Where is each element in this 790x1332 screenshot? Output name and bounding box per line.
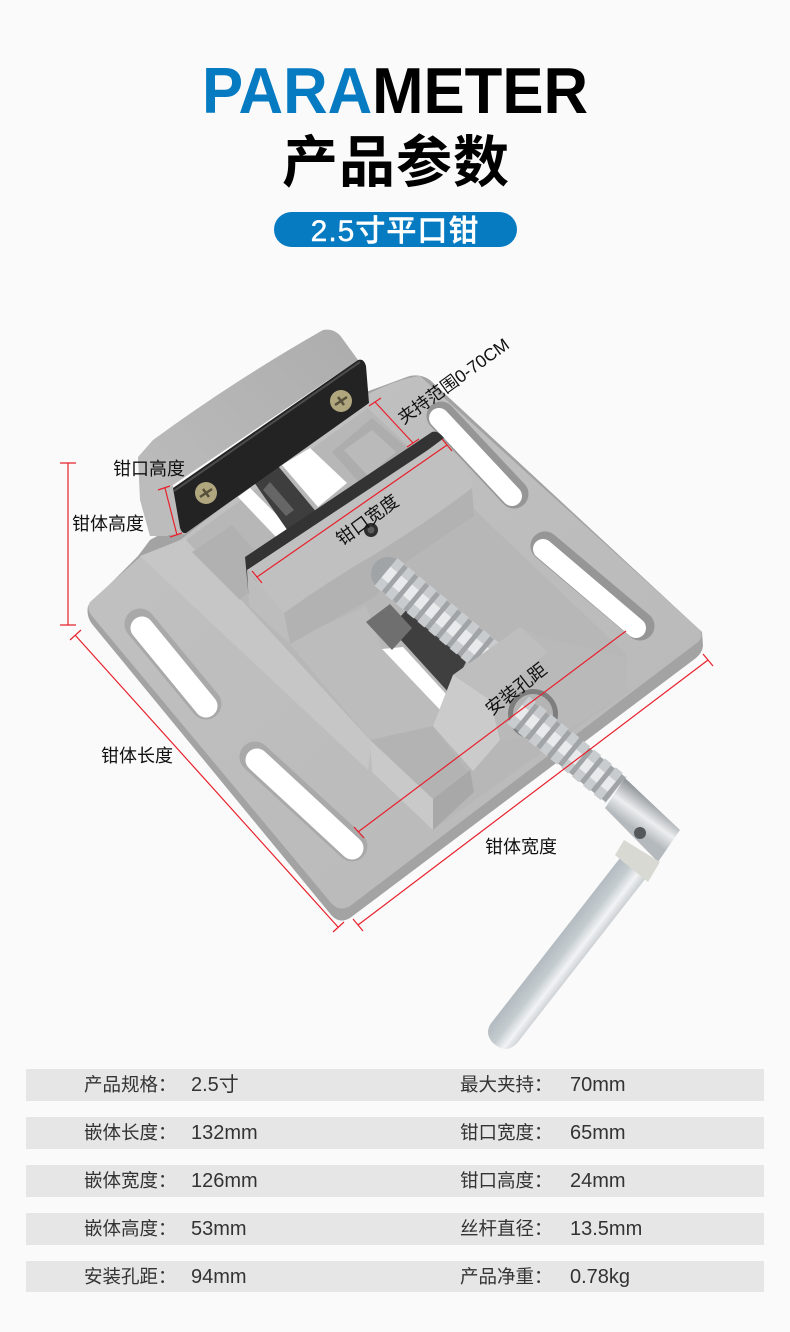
handle rod [488, 858, 646, 1049]
label: jaw width: 钳口宽度 [332, 491, 402, 549]
label: jaw height: 钳口高度 [113, 459, 185, 479]
row 2: 嵌体长度： [84, 1122, 177, 1143]
screws [195, 482, 217, 504]
row 2: 65mm [570, 1122, 626, 1144]
badge: product model: 2.5寸平口钳 [311, 215, 479, 248]
guide rails and channel [140, 408, 627, 830]
row 3: 钳口高度： [460, 1170, 553, 1191]
dimension line: clamp range [369, 398, 419, 447]
front channel [390, 606, 466, 694]
row 5 [26, 1261, 764, 1292]
label: body length: 钳体长度 [101, 746, 173, 766]
screw bridge block [433, 627, 627, 771]
product photo: bench vise illustration [88, 330, 703, 1049]
heading: 产品参数: 产品参数 [282, 131, 510, 194]
dimension line: jaw height [158, 486, 182, 537]
front screw thread [386, 572, 494, 662]
black jaw insert [173, 360, 369, 533]
moving jaw [245, 432, 474, 644]
row 3: 126mm [191, 1170, 258, 1192]
row 1: 产品规格： [84, 1074, 177, 1095]
handle joint [615, 840, 660, 882]
row 5: 0.78kg [570, 1266, 630, 1288]
spec table [26, 1069, 764, 1292]
row 4 [26, 1213, 764, 1245]
lower block [370, 726, 467, 799]
row 3 [26, 1165, 764, 1197]
row 5: 安装孔距： [84, 1266, 177, 1287]
row 2 [26, 1117, 764, 1149]
row 5: 94mm [191, 1266, 247, 1288]
dimension line: body width [353, 654, 713, 931]
label: clamping range: 夹持范围0-70CM [394, 334, 513, 428]
row 1: 2.5寸 [191, 1073, 239, 1096]
row 4: 53mm [191, 1218, 247, 1240]
side ridge [140, 538, 372, 770]
row 3: 嵌体宽度： [84, 1170, 177, 1191]
collar [605, 778, 680, 862]
dimension line: jaw width [252, 439, 452, 583]
bed [186, 408, 627, 830]
row 3: 24mm [570, 1170, 626, 1192]
row 1: 70mm [570, 1074, 626, 1096]
label: body height: 钳体高度 [72, 514, 144, 534]
label: mounting hole distance: 安装孔距 [482, 659, 551, 719]
channel windows [238, 488, 290, 538]
rear rails [332, 418, 412, 490]
label: body width: 钳体宽度 [485, 837, 557, 857]
row 2: 钳口宽度： [460, 1122, 553, 1143]
row 1: 最大夹持： [460, 1074, 553, 1095]
base plate [88, 375, 703, 921]
row 5: 产品净重： [460, 1266, 553, 1287]
rear screw thread [518, 710, 616, 790]
mounting slots [140, 416, 640, 848]
row 4: 丝杆直径： [460, 1218, 553, 1239]
title: PARAMETER: PARAMETER [202, 54, 588, 127]
row 4: 嵌体高度： [84, 1218, 177, 1239]
left front rail [288, 606, 442, 742]
lead screw rod [254, 466, 412, 650]
row 2: 132mm [191, 1122, 258, 1144]
dimension line: mounting hole distance [354, 631, 626, 838]
rear screw and handle [488, 710, 680, 1049]
back jaw [138, 330, 369, 536]
row 4: 13.5mm [570, 1218, 642, 1240]
row 1 [26, 1069, 764, 1101]
dimension line: body length [70, 630, 344, 932]
badge: product model [274, 212, 517, 248]
dimension line: body height [60, 463, 76, 625]
